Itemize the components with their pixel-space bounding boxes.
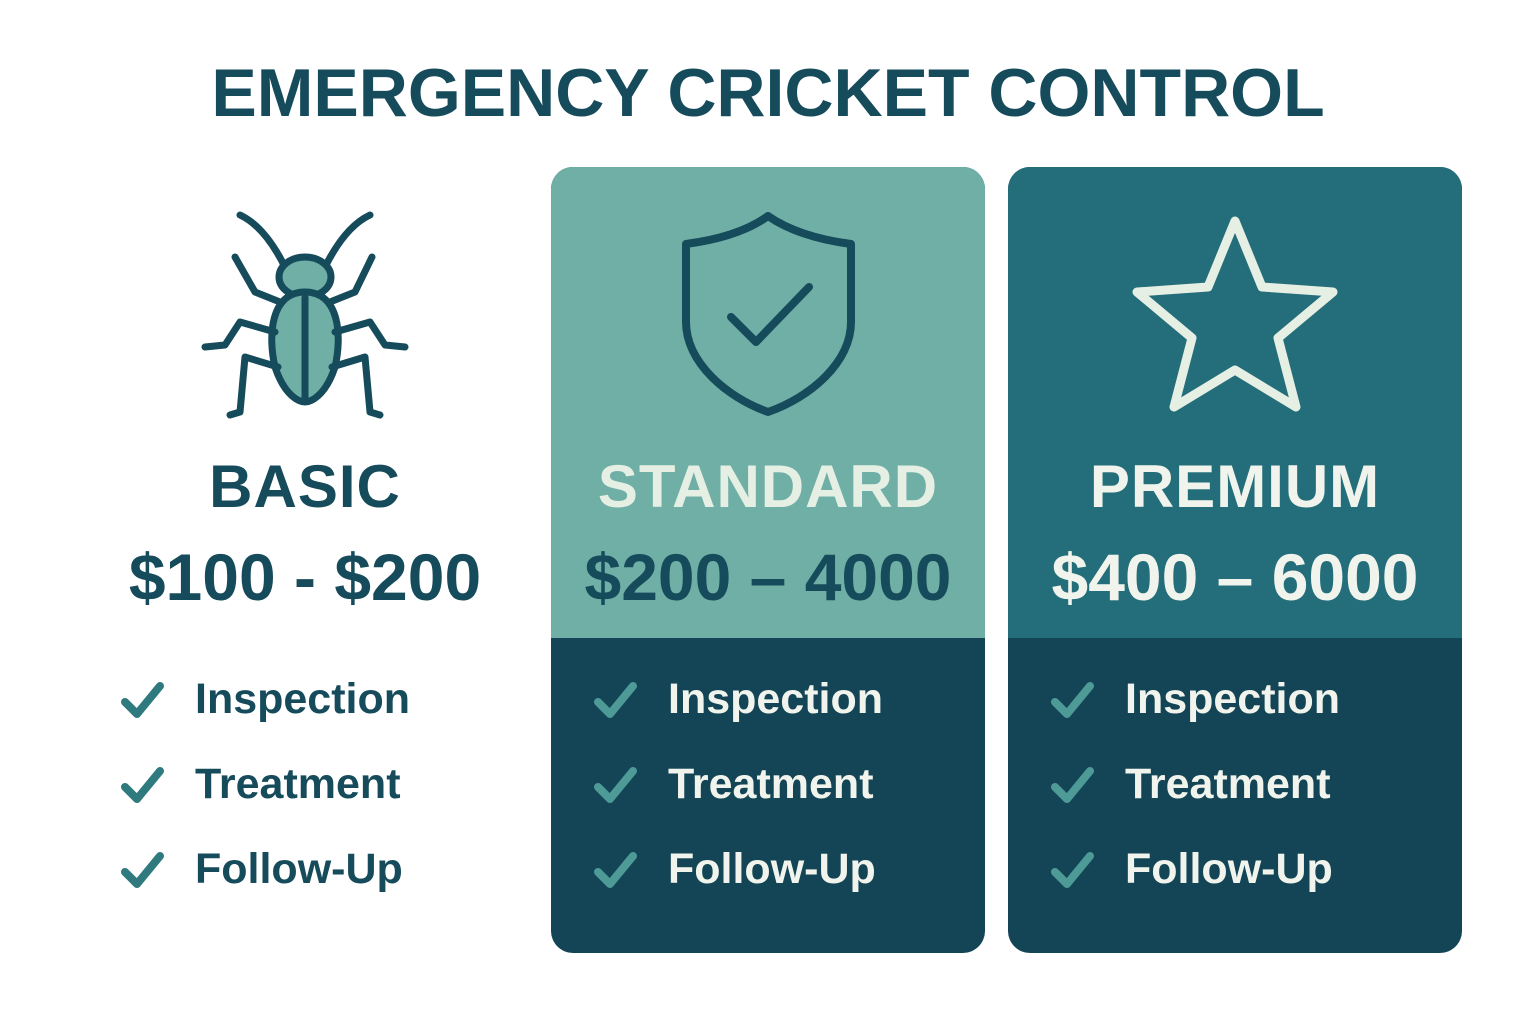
checklist: standard: Inspection — [668, 675, 883, 723]
checklist: premium: Treatment — [1125, 760, 1331, 808]
standard top section — [551, 167, 985, 638]
checklist: premium: Follow-Up — [1125, 845, 1333, 893]
checklist: standard: Treatment — [668, 760, 874, 808]
checklist: premium: Inspection — [1125, 675, 1340, 723]
premium top section — [1008, 167, 1462, 638]
checklist: basic: Treatment — [195, 760, 401, 808]
checklist: basic: Follow-Up — [195, 845, 403, 893]
checklist: premium — [1051, 675, 1340, 893]
heading: premium: PREMIUM — [1090, 453, 1380, 520]
checklist: standard — [594, 675, 883, 893]
icon: star — [1132, 216, 1338, 412]
checklist: basic: Inspection — [195, 675, 410, 723]
heading: standard: STANDARD — [598, 453, 938, 520]
price: standard: $200 – 4000 — [584, 540, 952, 614]
price: premium: $400 – 6000 — [1051, 540, 1419, 614]
panel: basic — [121, 212, 481, 893]
icon: cricket — [202, 212, 408, 418]
title: EMERGENCY CRICKET CONTROL — [211, 55, 1325, 131]
checklist: standard: Follow-Up — [668, 845, 876, 893]
icon: shield — [682, 212, 855, 416]
panel: premium — [1008, 167, 1462, 953]
panel: standard — [551, 167, 985, 953]
checklist: basic — [121, 675, 410, 893]
price: basic: $100 - $200 — [129, 540, 481, 614]
heading: basic: BASIC — [209, 453, 401, 520]
